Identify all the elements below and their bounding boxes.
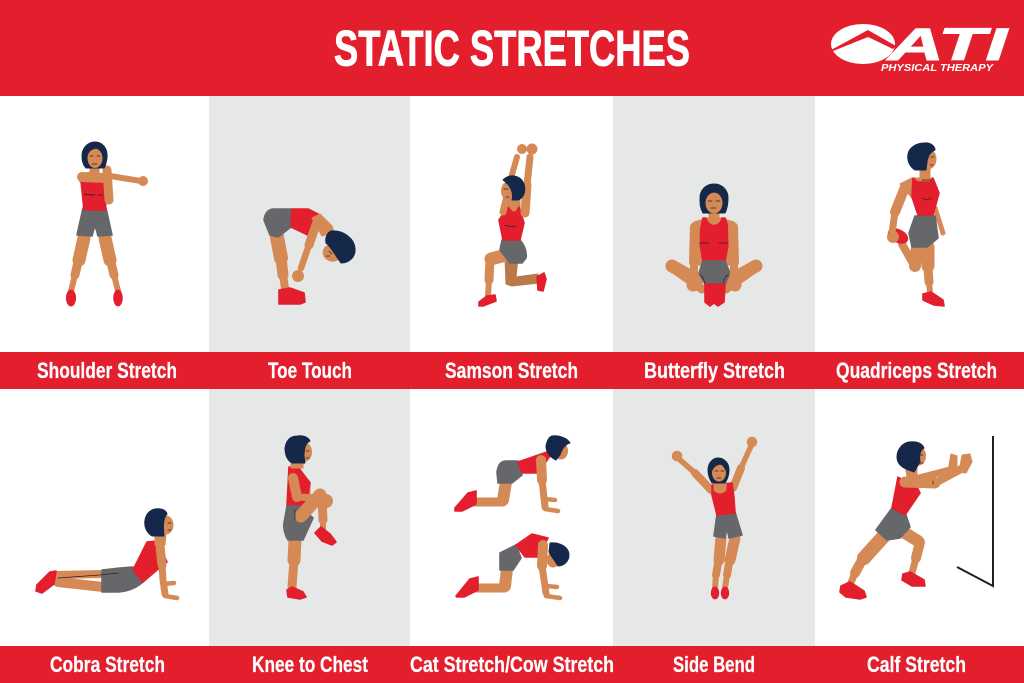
cow pose [455, 436, 570, 511]
figure: knee to chest [284, 436, 336, 599]
label: Samson Stretch: Samson Stretch [445, 358, 578, 383]
label: Toe Touch: Toe Touch [268, 358, 352, 383]
figure: toe touch [264, 209, 355, 304]
figure: quadriceps stretch [886, 143, 944, 306]
figure: side bend [672, 437, 757, 599]
label: Side Bend: Side Bend [673, 652, 755, 677]
label: Calf Stretch: Calf Stretch [867, 652, 966, 677]
label: Shoulder Stretch: Shoulder Stretch [37, 358, 177, 383]
title: STATIC STRETCHES [334, 20, 690, 76]
figure: shoulder stretch [67, 142, 148, 306]
figure: samson stretch [479, 144, 546, 306]
logo: ATI Physical Therapy: ATI [886, 19, 1010, 70]
header banner [0, 0, 1024, 96]
figure: butterfly stretch [671, 184, 757, 306]
figure: cat and cow stretch [455, 436, 570, 598]
label: Butterfly Stretch: Butterfly Stretch [644, 358, 785, 383]
label: Knee to Chest: Knee to Chest [252, 652, 369, 677]
label: Cobra Stretch: Cobra Stretch [50, 652, 165, 677]
wall line [957, 436, 993, 586]
label: Cat Stretch/Cow Stretch: Cat Stretch/Cow Stretch [410, 652, 614, 677]
figure: cobra stretch [36, 509, 177, 598]
cat pose [456, 534, 569, 598]
figure: calf stretch with wall [840, 436, 993, 599]
panel: grey column backgrounds [209, 96, 815, 646]
label bar: bottom row [0, 646, 1024, 683]
label bar: top row [0, 352, 1024, 389]
logo: ATI Physical Therapy [831, 19, 1010, 74]
logo: ATI Physical Therapy: PHYSICAL THERAPY [881, 62, 994, 74]
